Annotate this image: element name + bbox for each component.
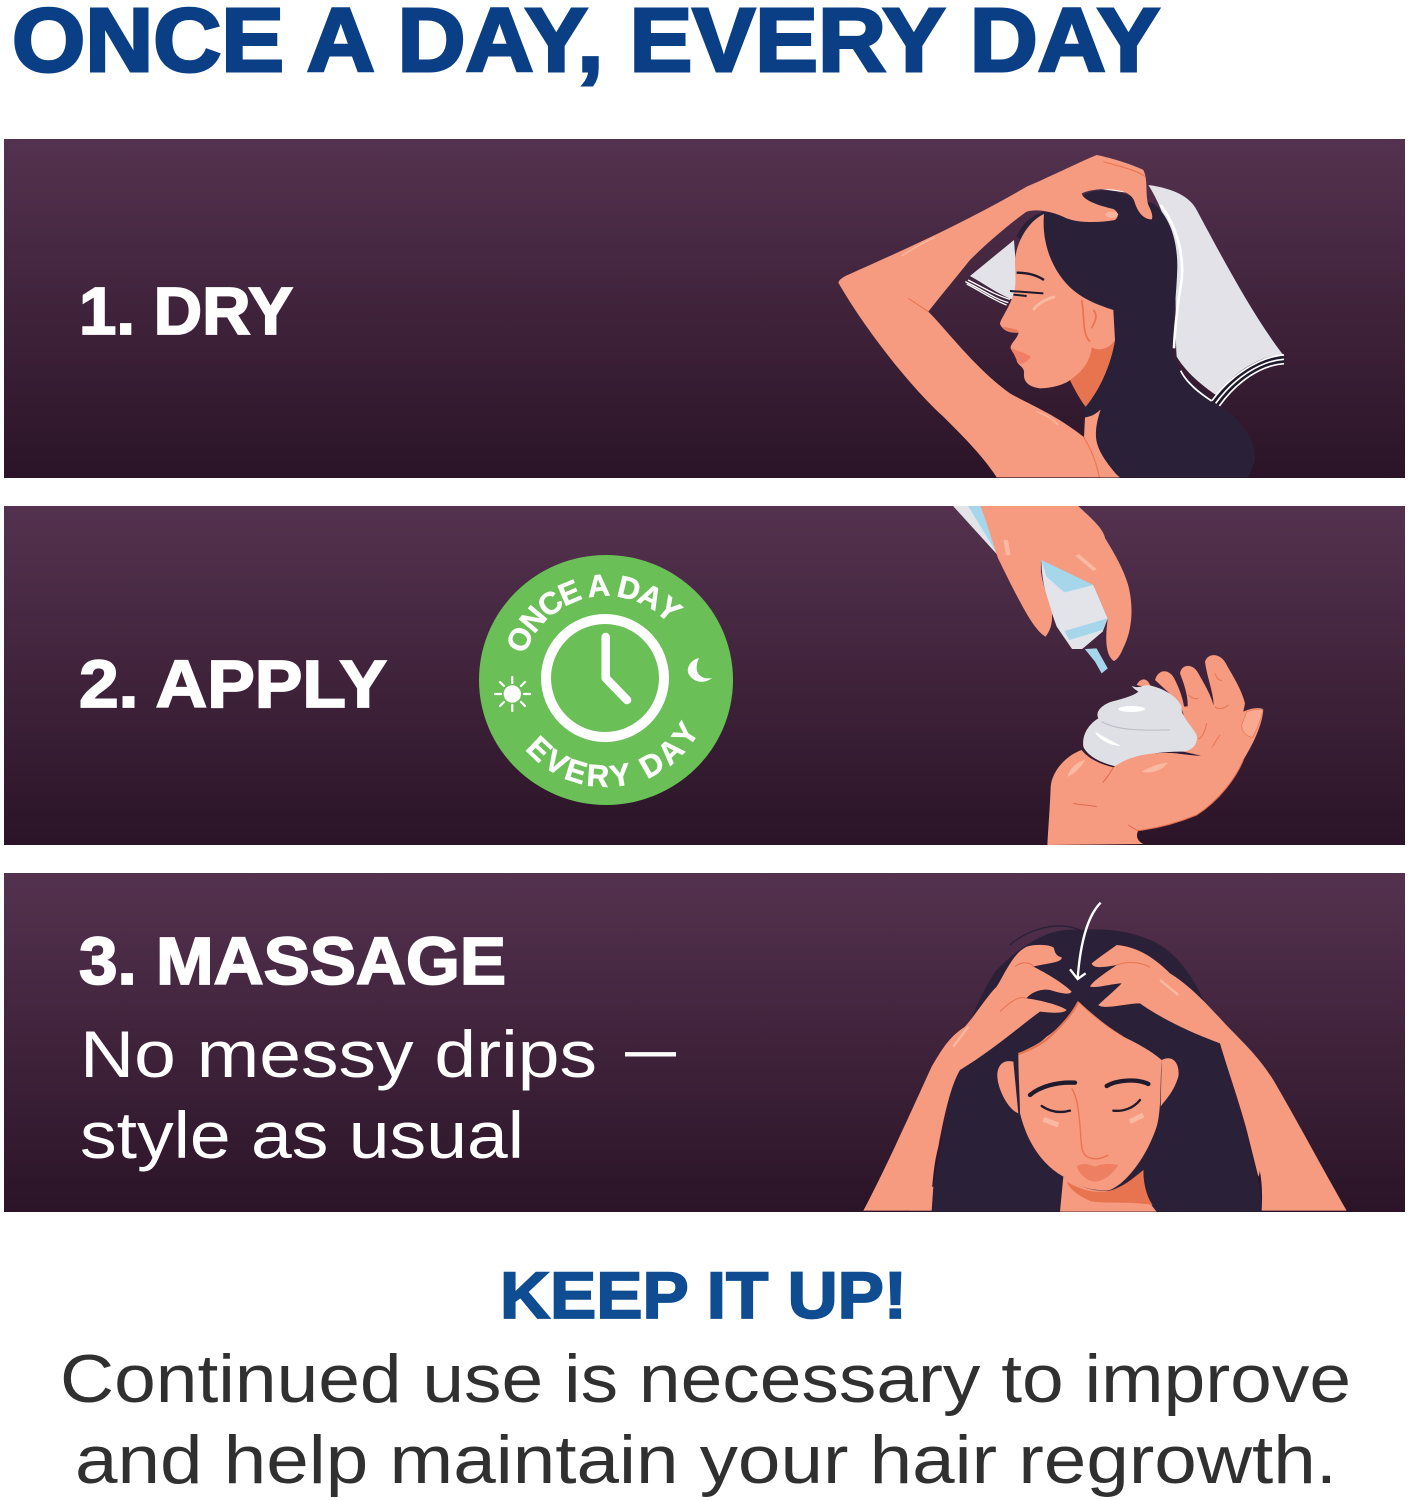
neck and shoulder skin bbox=[1084, 409, 1119, 477]
upper hand with tube bbox=[952, 505, 1132, 673]
step 3 heading: 3. MASSAGE bbox=[79, 924, 506, 999]
left arm and hand bbox=[863, 945, 1072, 1211]
right arm and hand bbox=[1090, 945, 1347, 1211]
face bbox=[1018, 1002, 1162, 1190]
icon: clock bbox=[546, 619, 664, 737]
step 3 text bbox=[80, 1011, 676, 1172]
subheading: keep it up: KEEP IT UP! bbox=[500, 1258, 907, 1332]
illustration: woman massaging scalp bbox=[863, 903, 1347, 1212]
neck bbox=[1060, 1170, 1157, 1212]
panel: step 1 dry bbox=[4, 139, 1405, 478]
step 3 text: style as usual bbox=[80, 1098, 524, 1172]
closing text: and help maintain your hair regrowth. bbox=[75, 1422, 1337, 1498]
raised arm and hand bbox=[838, 155, 1152, 477]
illustration: woman drying hair with towel bbox=[838, 155, 1284, 477]
closing text: Continued use is necessary to improve bbox=[60, 1341, 1351, 1417]
badge text: once a day: ONCE A DAY bbox=[508, 574, 684, 651]
step 3 text: — bbox=[625, 1011, 676, 1085]
icon: moon bbox=[688, 658, 712, 682]
panel: step 3 massage bbox=[4, 873, 1405, 1212]
step 2 heading: 2. APPLY bbox=[79, 647, 387, 722]
face bbox=[1000, 214, 1115, 407]
ears bbox=[997, 1058, 1179, 1113]
step 3 text: No messy drips bbox=[80, 1017, 597, 1091]
step 1 heading: 1. DRY bbox=[79, 274, 293, 349]
arrow bbox=[1070, 903, 1101, 979]
badge text: every day: EVERY DAY bbox=[526, 720, 696, 788]
closing text bbox=[60, 1341, 1351, 1498]
panel: step 2 apply bbox=[4, 506, 1405, 845]
lower hand with foam bbox=[1047, 655, 1263, 845]
illustration: hands applying foam bbox=[952, 505, 1263, 845]
icon: sun bbox=[495, 677, 530, 711]
badge: once a day every day bbox=[479, 555, 733, 805]
